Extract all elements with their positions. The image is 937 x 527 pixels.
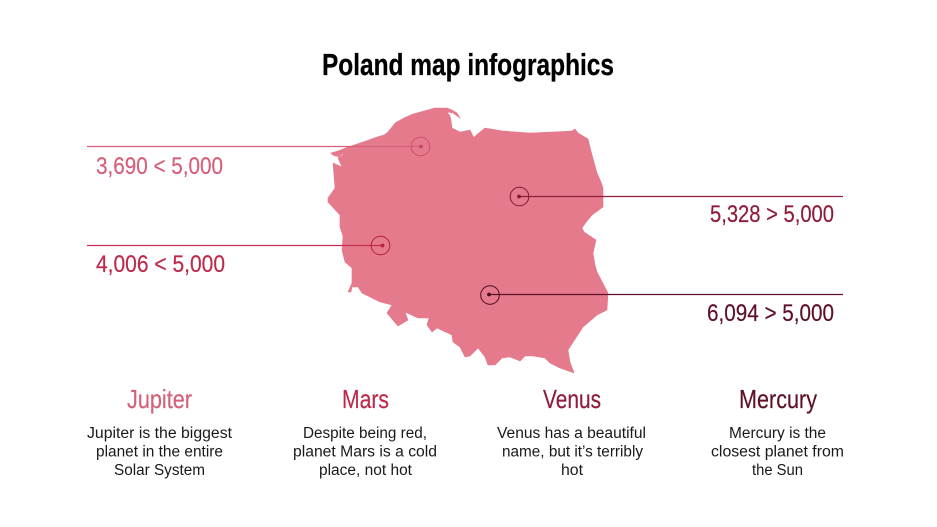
marker: Mars: [87, 236, 390, 255]
map of Poland: [328, 108, 608, 373]
text: Jupiter description: Jupiter is the biggest: [87, 425, 233, 442]
marker: Venus: [510, 187, 843, 206]
column: Mars: [293, 384, 437, 479]
text: Mercury description: closest planet from: [711, 444, 844, 460]
heading: Jupiter: Jupiter: [127, 384, 192, 414]
text: Jupiter description: [87, 425, 233, 479]
heading: Mercury: Mercury: [739, 384, 817, 414]
text: Mars description: [293, 425, 437, 479]
Hel spit and lagoon detail: [330, 148, 345, 157]
column: Venus: [497, 384, 646, 479]
marker: Mercury: [481, 286, 843, 304]
text: Venus description: hot: [561, 462, 584, 479]
title: Poland map infographics: [322, 47, 614, 82]
text: Mercury description: Mercury is the: [729, 425, 826, 442]
text: Jupiter description: planet in the entire: [96, 444, 223, 460]
text: Venus description: Venus has a beautiful: [497, 425, 646, 442]
value: Mercury: 6,094 > 5,000: [707, 300, 834, 327]
text: Mercury description: the Sun: [752, 462, 803, 479]
heading: Venus: Venus: [543, 384, 601, 414]
text: Mars description: Despite being red,: [303, 425, 427, 442]
column: Jupiter: [87, 384, 233, 479]
text: Venus description: [497, 425, 646, 479]
value: Mars: 4,006 < 5,000: [96, 251, 225, 278]
value: Jupiter: 3,690 < 5,000: [96, 153, 223, 180]
text: Venus description: name, but it’s terribly: [502, 444, 643, 460]
column: Mercury: [711, 384, 844, 479]
value: Venus: 5,328 > 5,000: [710, 201, 834, 228]
marker: Jupiter: [87, 137, 430, 156]
text: Mars description: planet Mars is a cold: [293, 444, 437, 460]
heading: Mars: Mars: [342, 384, 389, 414]
text: Mercury description: [711, 425, 844, 479]
text: Jupiter description: Solar System: [114, 462, 205, 479]
text: Mars description: place, not hot: [319, 462, 413, 479]
